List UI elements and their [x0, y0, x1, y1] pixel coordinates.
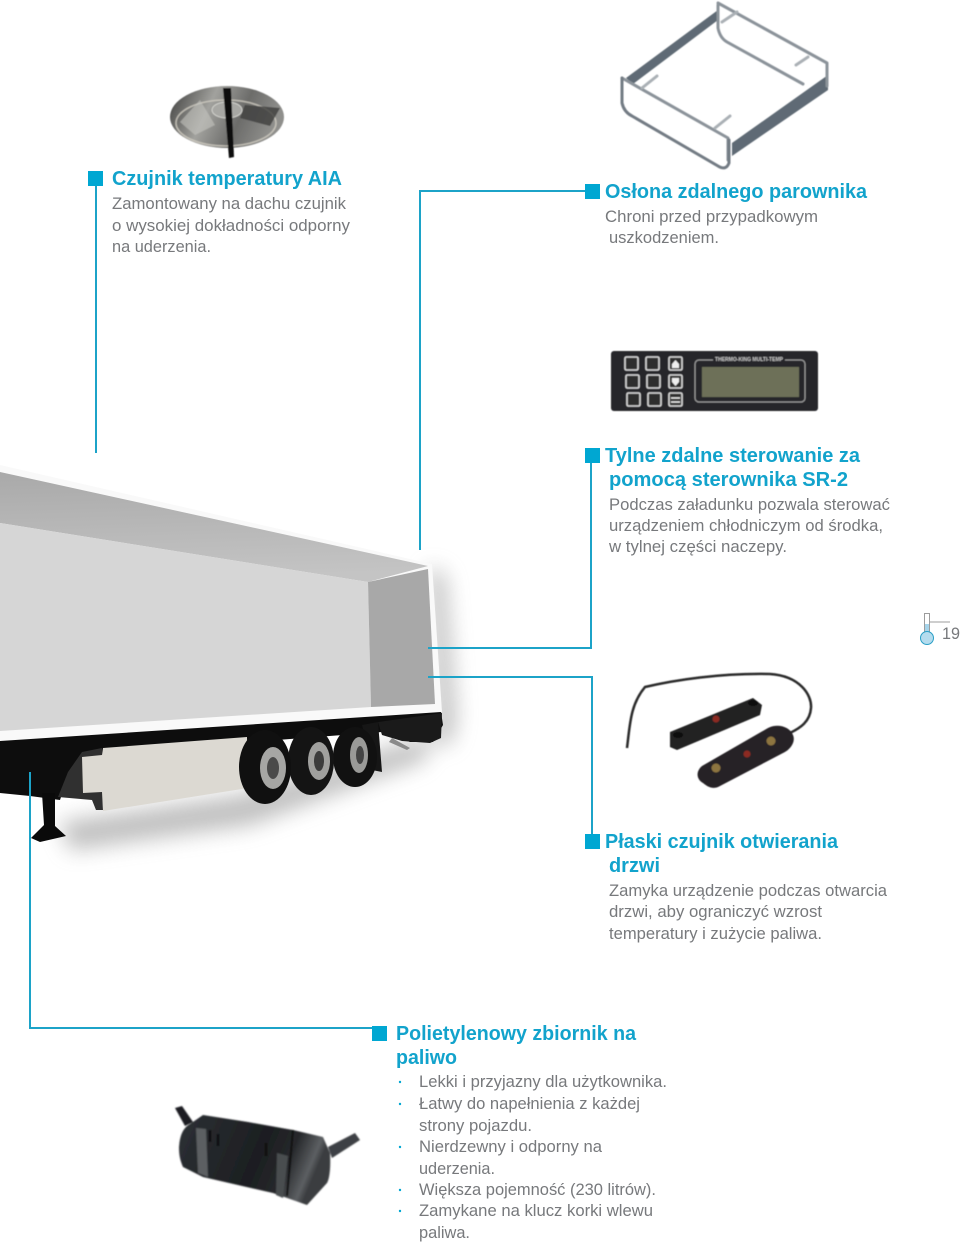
marker square [585, 184, 600, 199]
bullet list: Większa pojemność (230 litrów). [419, 1181, 656, 1199]
description: temperatury i zużycie paliwa. [609, 925, 822, 943]
bullet list: Lekki i przyjazny dla użytkownika. [419, 1073, 667, 1091]
wheels [239, 727, 377, 804]
photo: AIA temperature sensor [170, 86, 284, 158]
heading: drzwi [609, 855, 660, 877]
description: Podczas załadunku pozwala sterować [609, 496, 890, 514]
description: na uderzenia. [112, 238, 211, 256]
heading: Polietylenowy zbiornik na [396, 1023, 637, 1045]
heading [605, 831, 839, 877]
block: flat door sensor [585, 831, 888, 943]
description: Zamyka urządzenie podczas otwarcia [609, 882, 888, 900]
connector line: fuel tank [30, 772, 375, 1028]
description: w tylnej części naczepy. [608, 538, 787, 556]
description [605, 208, 818, 247]
bullet list: strony pojazdu. [419, 1117, 532, 1135]
landing leg [31, 793, 66, 842]
rear panel [368, 569, 435, 707]
description: Chroni przed przypadkowym [605, 208, 818, 226]
display heading: THERMO-KING MULTI-TEMP [715, 357, 784, 363]
keypad [625, 357, 682, 406]
description [608, 496, 890, 556]
side box [82, 737, 248, 811]
block: fuel tank [372, 1023, 667, 1242]
mudguard [362, 722, 382, 772]
description: Zamontowany na dachu czujnik [112, 195, 347, 213]
icon: thermometer [920, 614, 950, 644]
bullet list: uderzenia. [419, 1160, 495, 1178]
trailer shadow [60, 566, 456, 850]
ceiling [0, 472, 428, 582]
bullet list: Zamykane na klucz korki wlewu [419, 1202, 653, 1220]
block: temperature sensor [88, 168, 351, 256]
description [609, 882, 888, 943]
connector line: remote evaporator guard [420, 191, 590, 550]
display frame [695, 360, 805, 402]
heading [605, 445, 861, 491]
connector line: rear remote control [428, 460, 591, 648]
bullet list: Nierdzewny i odporny na [419, 1138, 603, 1156]
bullet list [399, 1073, 667, 1242]
page number: 19 [942, 625, 960, 643]
marker square [585, 834, 600, 849]
bullet list: paliwa. [419, 1224, 470, 1242]
block: rear remote control [585, 445, 890, 556]
description: drzwi, aby ograniczyć wzrost [609, 903, 822, 921]
bullet list: Łatwy do napełnienia z każdej [419, 1095, 640, 1113]
heading: Tylne zdalne sterowanie za [605, 445, 861, 467]
heading: Czujnik temperatury AIA [112, 168, 342, 190]
image: refrigerated trailer [0, 465, 456, 850]
marker square [372, 1026, 387, 1041]
description [112, 195, 351, 256]
description: o wysokiej dokładności odporny [112, 217, 351, 235]
heading: paliwo [396, 1047, 457, 1069]
trailer body outline [0, 465, 442, 742]
description: uszkodzeniem. [609, 229, 719, 247]
marker square [88, 171, 103, 186]
description: urządzeniem chłodniczym od środka, [609, 517, 883, 535]
connector line: temperature sensor [95, 180, 97, 453]
photo: SR-2 rear controller [611, 351, 818, 411]
page number with thermometer icon [920, 614, 960, 644]
photo: flat door sensor [627, 674, 811, 788]
photo: evaporator guard frame [622, 3, 828, 168]
photo: polyethylene fuel tank [175, 1106, 360, 1205]
chassis [0, 712, 443, 800]
heading [396, 1023, 637, 1069]
side wall [0, 523, 371, 731]
connector line: door sensor [428, 677, 592, 838]
heading: Osłona zdalnego parownika [605, 181, 868, 203]
marker square [585, 448, 600, 463]
block: evaporator guard [585, 181, 868, 247]
heading: Płaski czujnik otwierania [605, 831, 839, 853]
heading: pomocą sterownika SR-2 [609, 469, 848, 491]
